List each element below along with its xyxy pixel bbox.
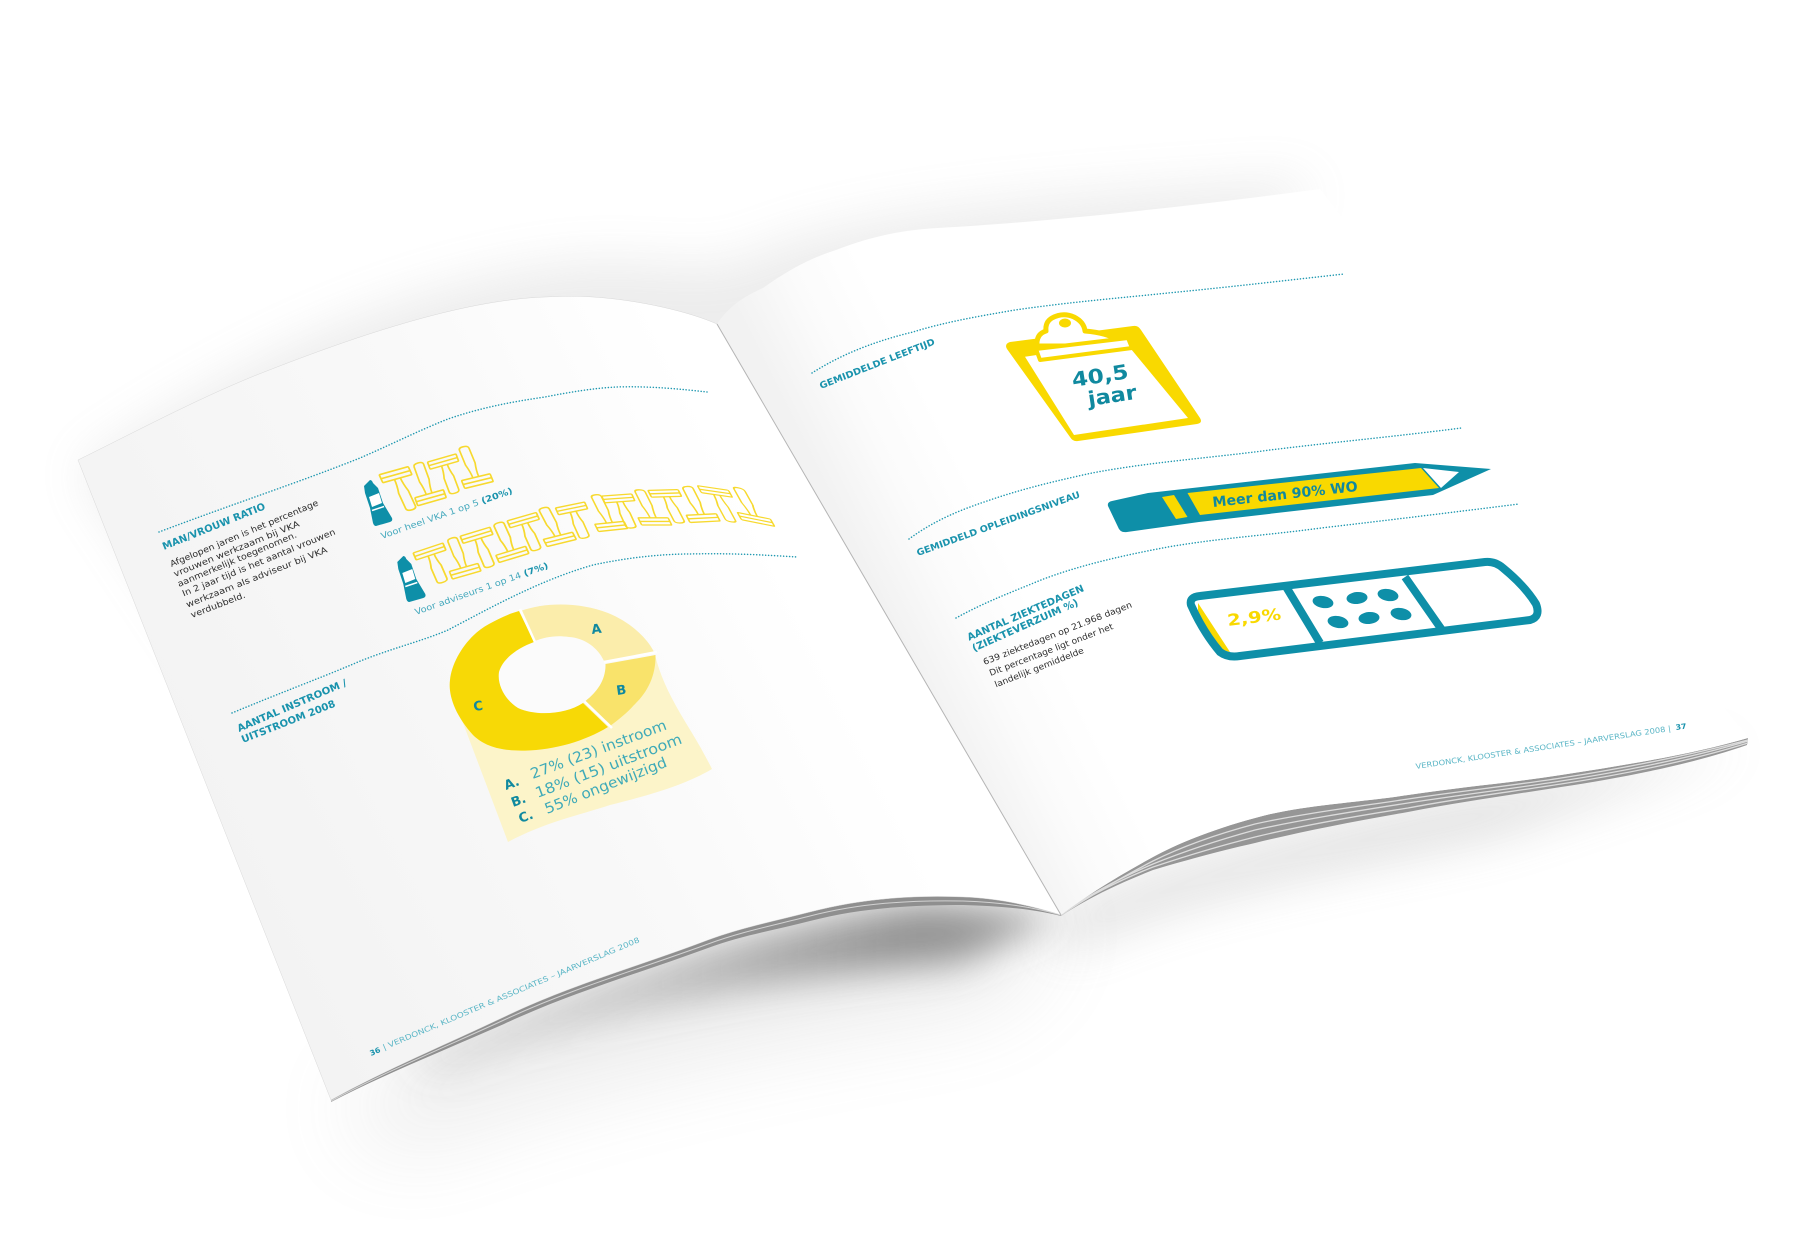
heading: gemiddeld opleidingsniveau: GEMIDDELD OPLEIDINGSNIVEAU (915, 490, 1082, 559)
panel: left page (78, 296, 1061, 1100)
heading: aantal ziektedagen: (ZIEKTEVERZUIM %) (971, 598, 1080, 654)
icon: bandage (1191, 562, 1538, 656)
text block: man/vrouw (169, 499, 337, 621)
panel: legend backing (460, 655, 712, 842)
panel: right page (717, 189, 1748, 915)
slice B (586, 655, 656, 726)
page stack: left (331, 897, 1061, 1102)
slice A (520, 604, 654, 661)
text block: man/vrouw: In 2 jaar tijd is het aantal vrouwen (181, 528, 337, 599)
legend: B. (509, 792, 528, 811)
footer: right page: 37 (1675, 721, 1687, 732)
text: 40,5 jaar: 40,5 (1070, 359, 1130, 392)
heading: gemiddelde leeftijd: GEMIDDELDE LEEFTIJD (818, 337, 937, 392)
legend: C. (517, 808, 535, 827)
caption: VKA ratio: Voor heel VKA 1 op 5 (20%) (380, 486, 514, 542)
text block: ziektedagen: landelijk gemiddelde (993, 646, 1085, 690)
slice labels: B (615, 683, 627, 699)
slice labels: C (472, 699, 484, 715)
slice labels: A (590, 622, 603, 638)
legend: A. (502, 774, 522, 794)
text block: ziektedagen (982, 600, 1134, 690)
footer: left page: 36 (368, 1045, 382, 1058)
text: meer dan 90% WO: Meer dan 90% WO (1212, 479, 1359, 511)
text block: man/vrouw: werkzaam als adviseur bij VKA (185, 545, 329, 610)
razors row 2 (413, 484, 774, 587)
book shadows (80, 180, 1745, 1150)
text block: man/vrouw: vrouwen werkzaam bij VKA (172, 519, 301, 580)
heading: aantal instroom / uitstroom: UITSTROOM 2008 (240, 699, 337, 746)
icon: pencil (1108, 463, 1491, 532)
heading: man/vrouw ratio: MAN/VROUW RATIO (161, 502, 267, 553)
page stack: right (1061, 738, 1748, 916)
text block: ziektedagen: Dit percentage ligt onder het (988, 622, 1116, 679)
heading: aantal instroom / uitstroom: AANTAL INSTROOM / (236, 678, 349, 735)
slice labels (472, 622, 627, 715)
heading: aantal ziektedagen: AANTAL ZIEKTEDAGEN (966, 584, 1086, 643)
footer: left page: | VERDONCK, KLOOSTER & ASSOCIATES – JAARVERSLAG 2008 (381, 935, 641, 1052)
footer: right page: VERDONCK, KLOOSTER & ASSOCIATES – JAARVERSLAG 2008 | (1415, 724, 1671, 771)
legend: 27% (23) instroom (528, 718, 669, 783)
icon: lipstick row 1 (364, 480, 392, 526)
text block: man/vrouw: Afgelopen jaren is het percentage (169, 499, 320, 570)
text: 2,9%: 2,9% (1226, 605, 1282, 630)
razors row 1 (379, 443, 493, 514)
text block: ziektedagen: 639 ziektedagen op 21.968 dagen (982, 600, 1134, 668)
legend (502, 718, 684, 827)
icon: clipboard (1006, 315, 1201, 441)
caption: adviseurs ratio: Voor adviseurs 1 op 14 (7%) (414, 561, 550, 618)
donut chart (450, 604, 657, 751)
legend: 55% ongewijzigd (543, 755, 669, 818)
dots (1312, 587, 1412, 630)
text block: man/vrouw: aanmerkelijk toegenomen. (176, 531, 299, 590)
legend: 18% (15) uitstroom (533, 732, 684, 802)
footer: left page (368, 935, 641, 1058)
text: 40,5 jaar: jaar (1085, 380, 1138, 411)
text block: man/vrouw: verdubbeld. (189, 591, 247, 621)
icon: lipstick row 2 (397, 556, 426, 602)
text: 40,5 jaar (1070, 359, 1138, 411)
slice C (450, 611, 608, 751)
